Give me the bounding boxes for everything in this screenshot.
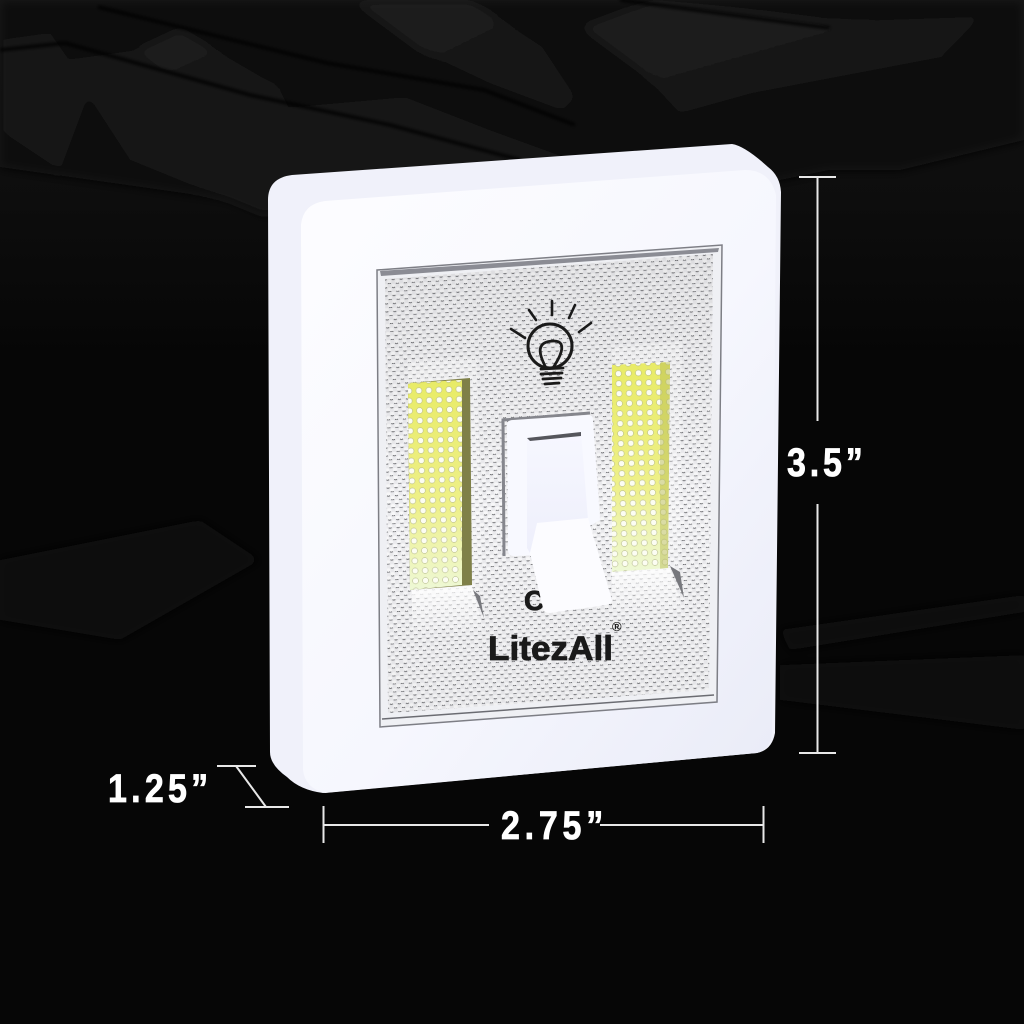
dimension: depth 1.25 inches bbox=[108, 765, 289, 811]
dimension: depth 1.25 inches: 1.25” bbox=[108, 765, 212, 811]
product: wall switch light bbox=[268, 144, 781, 793]
dimension: height 3.5 inches: 3.5” bbox=[787, 439, 867, 485]
rocker lower bbox=[530, 518, 612, 613]
dimension: width 2.75 inches: 2.75” bbox=[501, 802, 608, 848]
brand name bbox=[488, 619, 622, 668]
rocker upper bbox=[527, 432, 588, 553]
dimension: width 2.75 inches bbox=[323, 802, 764, 848]
right LED strip bbox=[610, 342, 684, 622]
dimension: height 3.5 inches bbox=[787, 177, 867, 753]
silver panel frame bbox=[377, 245, 722, 727]
brand name: ® bbox=[612, 619, 622, 634]
dotted reflector panel bbox=[385, 254, 713, 713]
rock veins bbox=[0, 0, 830, 160]
housing body bbox=[268, 144, 781, 793]
switch recess bbox=[503, 413, 590, 556]
brand name: LitezAll bbox=[488, 630, 613, 668]
left LED strip bbox=[408, 358, 484, 638]
icon: light bulb with rays bbox=[511, 301, 591, 384]
toggle switch bbox=[503, 413, 612, 613]
brand logo mark: C bbox=[524, 585, 544, 616]
switch plate bbox=[507, 415, 600, 556]
housing front face bbox=[301, 170, 776, 793]
